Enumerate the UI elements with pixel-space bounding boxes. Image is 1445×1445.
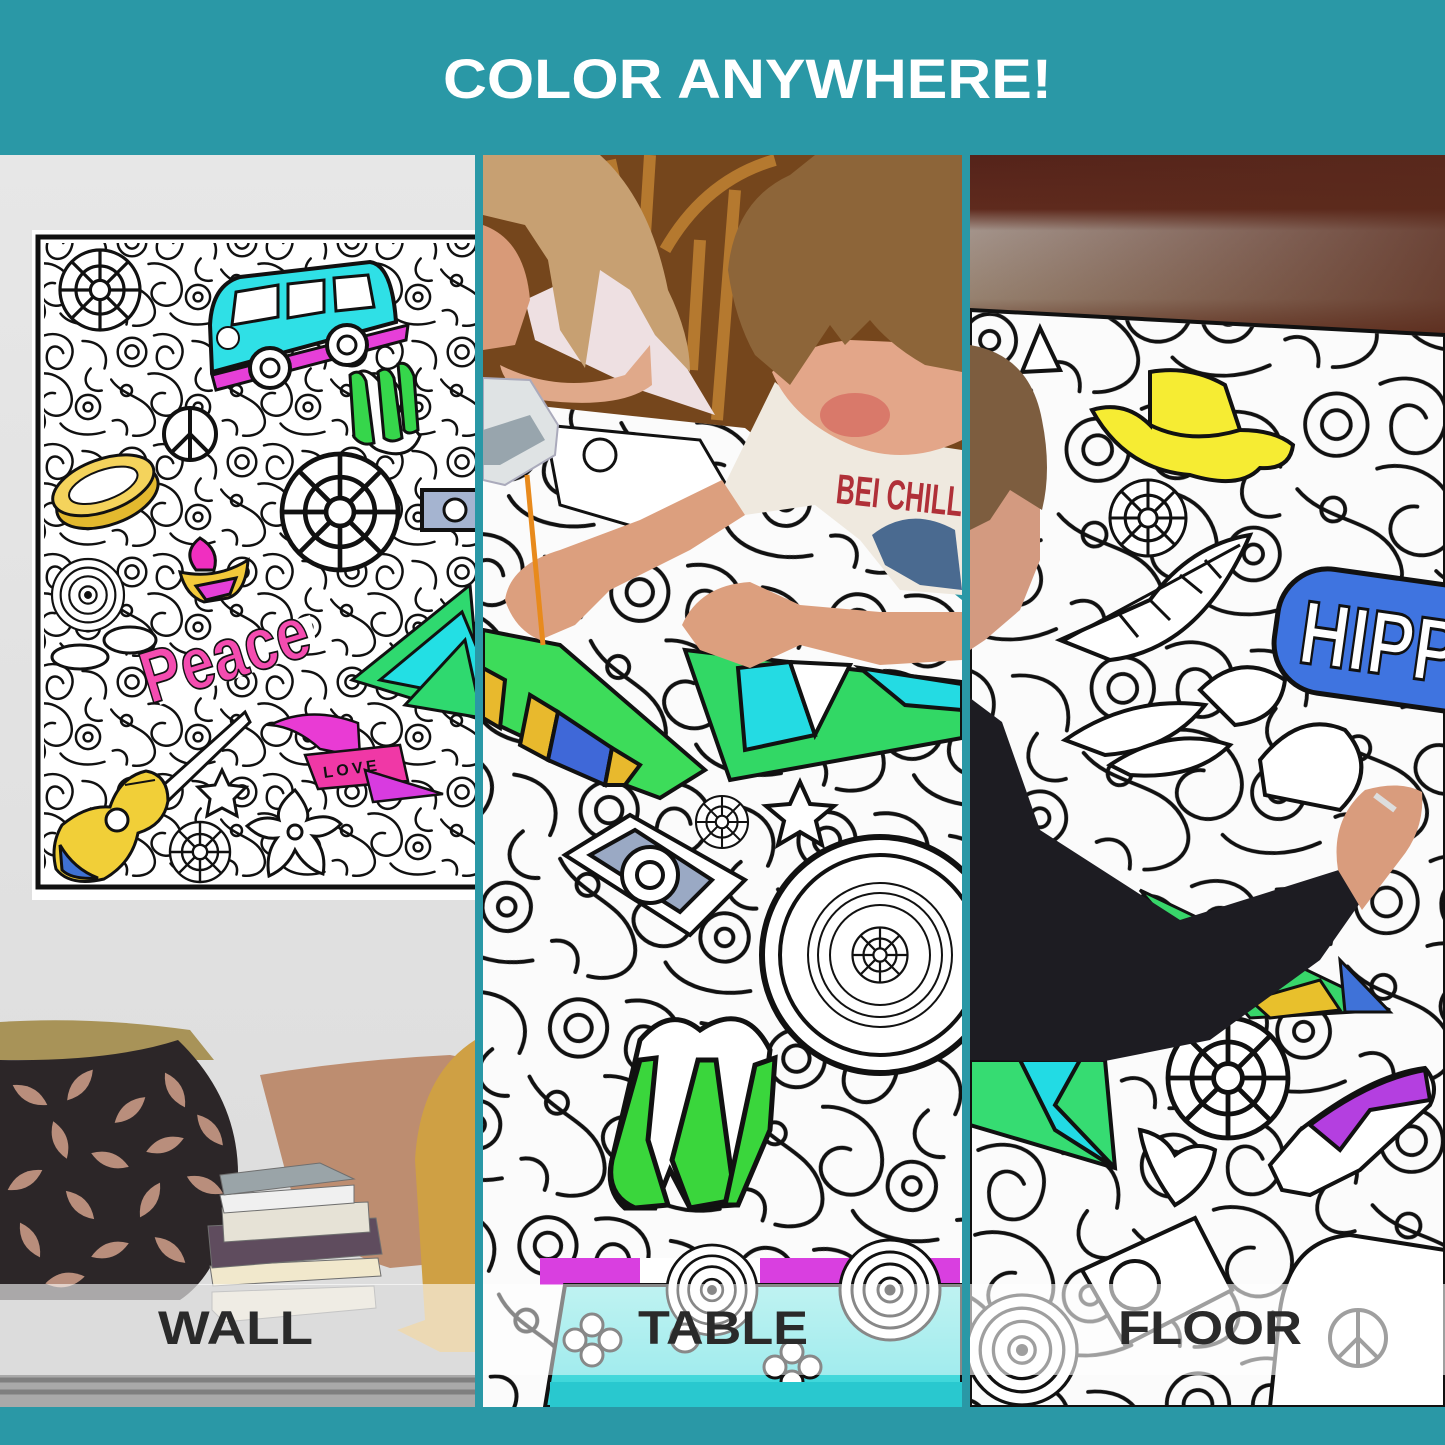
icon: spoked wheel — [1110, 480, 1186, 556]
panel: floor — [967, 155, 1445, 1407]
icon: hippie sign — [1268, 562, 1445, 722]
icon: glasses — [52, 627, 156, 669]
boy: shirt: BEI CHILL — [834, 465, 965, 525]
icon: yellow hat — [1092, 370, 1293, 481]
love banner: LOVE — [322, 758, 378, 782]
icon: star — [766, 782, 834, 845]
top banner — [0, 0, 1445, 155]
pillow — [260, 1055, 475, 1268]
icon: green shoes — [610, 1019, 775, 1208]
peace lettering — [138, 615, 316, 705]
label: table: TABLE — [638, 1301, 808, 1354]
icon: small wheel — [696, 796, 748, 848]
boy: head and hair — [728, 155, 962, 455]
icon: record — [282, 454, 398, 570]
peace lettering: Peace — [130, 590, 319, 719]
icon: cassette — [565, 815, 745, 935]
poster on table — [483, 400, 998, 1407]
stack of books — [208, 1163, 382, 1322]
icon: mandala — [170, 822, 230, 882]
icon: wheels and van — [540, 1240, 962, 1407]
man: black sweater — [970, 698, 1362, 1062]
poster on wall — [32, 230, 483, 900]
icon: purple shoe — [1270, 1068, 1434, 1195]
bottom band — [0, 1407, 1445, 1445]
panel dividers — [475, 155, 483, 1407]
paintbrush — [527, 475, 543, 645]
icon: candle bowl — [180, 538, 248, 602]
icon: bottom record — [967, 1295, 1077, 1405]
love banner — [270, 714, 443, 802]
boy: arms and hands — [505, 480, 962, 668]
boy: shirt — [722, 382, 965, 595]
icon: compass wheel — [1168, 1018, 1288, 1138]
icon: green shoes — [350, 363, 420, 454]
label band — [483, 1284, 962, 1375]
girl: hair — [483, 155, 690, 372]
basket with leaf fabric — [0, 1020, 238, 1300]
panel: wall — [0, 155, 483, 1407]
chair spindles — [610, 155, 775, 420]
man: head — [970, 345, 1047, 650]
wood floor — [970, 155, 1445, 335]
icon: feather — [1060, 535, 1250, 660]
storage box — [483, 378, 558, 485]
poster on floor — [967, 310, 1445, 1407]
icon: cyan van — [210, 262, 408, 390]
icon: tambourine — [51, 453, 160, 530]
label band — [970, 1284, 1445, 1375]
icon: green arrow — [483, 630, 705, 798]
icon: yellow and green pennant — [1140, 890, 1390, 1018]
label: wall: WALL — [158, 1301, 313, 1354]
icon: leaves — [1065, 703, 1230, 776]
icon: radio — [1082, 1218, 1232, 1345]
icon: green tent — [352, 585, 482, 720]
yellow chair — [397, 1040, 475, 1352]
icon: vinyl record — [759, 834, 962, 1076]
man: hand with marker — [1337, 785, 1422, 910]
icon: flower — [247, 790, 341, 876]
floor rug — [0, 1285, 475, 1407]
icon: green tent — [685, 650, 962, 780]
van doodle on poster — [550, 424, 726, 526]
icon: peace sign — [164, 408, 216, 460]
icon: camera — [422, 490, 482, 530]
icon: dreamcatcher — [60, 250, 140, 330]
panel: table — [483, 155, 998, 1407]
icon: left vinyl — [52, 559, 124, 631]
girl: shirt and arm — [483, 225, 715, 415]
icon: flower bud — [1200, 667, 1361, 810]
title: COLOR ANYWHERE! — [443, 47, 1052, 110]
icon: heart — [1140, 1130, 1215, 1205]
icon: van outline — [1270, 1235, 1445, 1407]
label: floor: FLOOR — [1118, 1301, 1302, 1354]
icon: star — [198, 770, 246, 816]
wood background — [483, 155, 962, 455]
icon: triangle — [1022, 328, 1060, 372]
icon: guitar — [54, 712, 250, 881]
label band — [0, 1284, 475, 1375]
icon: tent piece — [970, 1060, 1115, 1168]
